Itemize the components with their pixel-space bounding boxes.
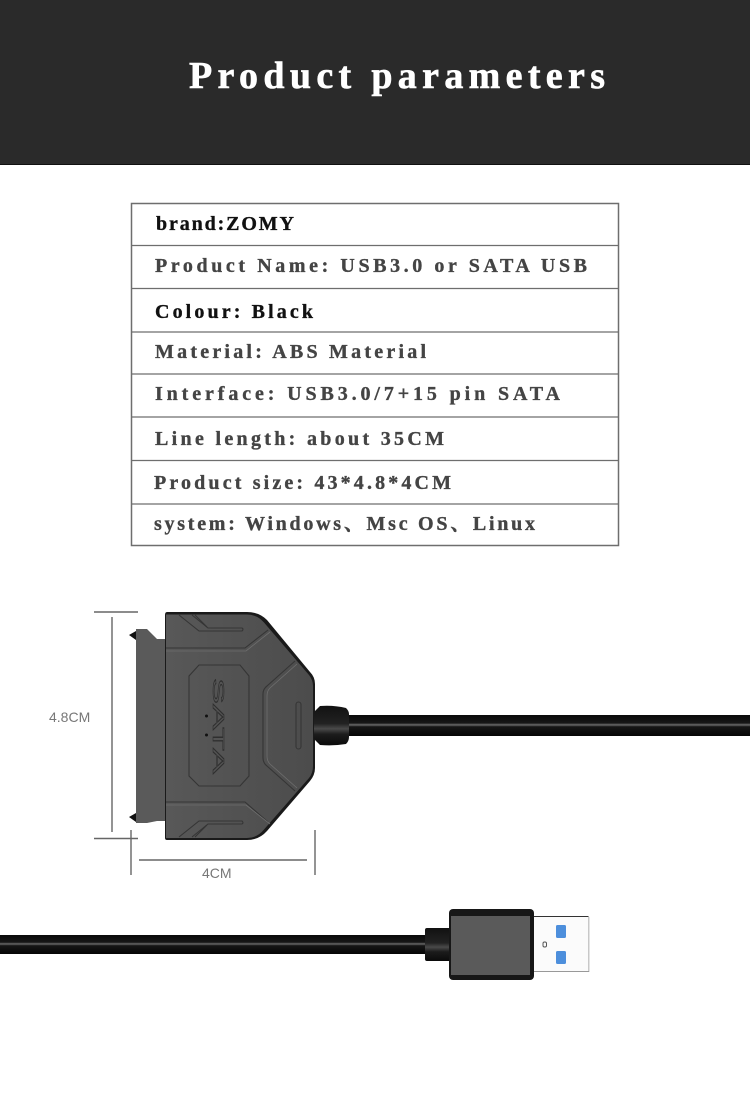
row: material: Material: ABS Material bbox=[155, 341, 426, 363]
USB plug bbox=[425, 909, 590, 980]
cable: USB side bbox=[0, 935, 428, 954]
dimension: width 4CM: 4CM bbox=[202, 865, 232, 881]
header banner bbox=[0, 0, 750, 165]
row: line length: Line length: about 35CM bbox=[155, 428, 444, 450]
title: Product parameters bbox=[189, 55, 605, 97]
row: colour: Colour: Black bbox=[155, 301, 314, 323]
strain relief bbox=[314, 706, 349, 745]
connector tongue bbox=[136, 629, 167, 823]
SATA logo: SATA bbox=[209, 678, 226, 775]
contacts bbox=[556, 925, 566, 938]
parameter table bbox=[132, 204, 618, 546]
metal tongue bbox=[533, 916, 589, 972]
body grooves bbox=[166, 615, 301, 837]
row: brand: brand:ZOMY bbox=[156, 213, 295, 235]
dimension: height 4.8CM: 4.8CM bbox=[49, 709, 90, 725]
indicator dots bbox=[205, 714, 208, 718]
row: interface: Interface: USB3.0/7+15 pin SATA bbox=[155, 383, 561, 405]
SATA adapter bbox=[129, 612, 349, 840]
small hole bbox=[543, 942, 546, 947]
cable: SATA side bbox=[345, 715, 750, 736]
adapter body bbox=[165, 612, 315, 840]
strain relief bbox=[425, 928, 451, 961]
row: system: system: Windows、Msc OS、Linux bbox=[154, 513, 535, 535]
housing bbox=[449, 909, 534, 980]
row: product name: Product Name: USB3.0 or SATA USB bbox=[155, 255, 587, 277]
row: product size: Product size: 43*4.8*4CM bbox=[154, 472, 451, 494]
